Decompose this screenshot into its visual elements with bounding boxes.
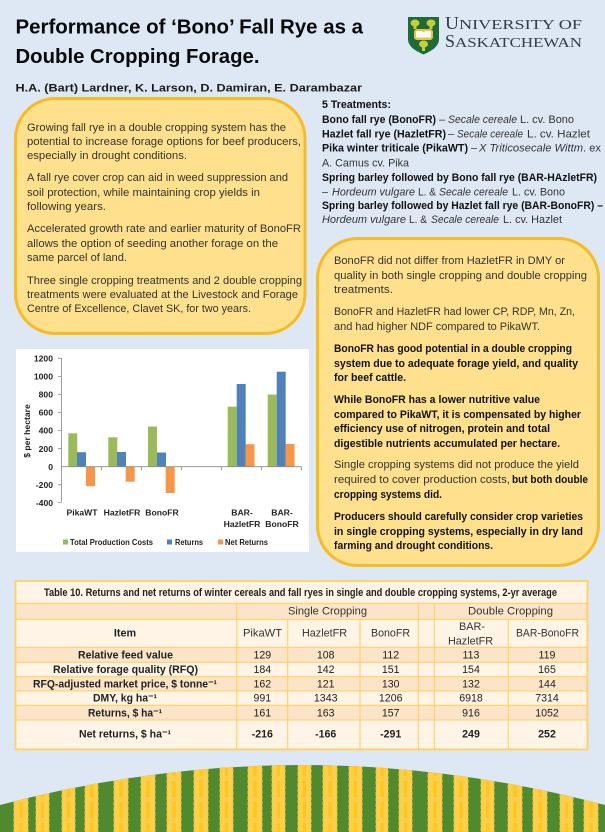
logo wordmark: S	[445, 31, 455, 51]
table values: 165	[538, 664, 556, 676]
table values	[253, 650, 559, 720]
table group headers	[288, 606, 553, 618]
treatment: barley followed by Bono	[322, 172, 597, 198]
bars: total production costs	[68, 394, 277, 467]
table net returns values: -166	[315, 729, 336, 741]
icon: crest shield	[408, 17, 439, 54]
introduction text: Growing fall rye in a double cropping system has the	[27, 122, 286, 134]
table values: 163	[317, 708, 335, 720]
treatment: barley followed by Bono: L. cv. Bono	[512, 186, 565, 198]
chart category labels: BonoFR	[265, 519, 299, 529]
table column headers: BAR-BonoFR	[516, 628, 579, 640]
introduction text: especially in drought conditions.	[27, 150, 187, 162]
logo wordmark: NIVERSITY OF	[459, 17, 583, 32]
title	[16, 16, 364, 68]
treatment: Pika winter triticale	[322, 142, 601, 170]
table column headers: BonoFR	[371, 628, 410, 640]
conclusions: regular text: quality in both single cropping and double cropping	[334, 270, 587, 282]
logo: University of Saskatchewan	[408, 13, 583, 54]
table net returns values: 249	[462, 729, 480, 741]
conclusions: bold text: but both double	[512, 474, 588, 486]
treatment: barley followed by Bono: Spring barley followed by Bono fall rye (BAR-HAzletFR)	[322, 172, 597, 184]
table net returns values	[252, 729, 556, 741]
chart legend	[63, 537, 268, 547]
table values: 119	[539, 650, 556, 662]
introduction text: Centre of Excellence, Clavet SK, for two years.	[27, 303, 251, 315]
conclusions: bold text: digestible nutrients accumulated per hectare.	[334, 438, 560, 450]
chart category labels	[66, 508, 299, 529]
conclusions: regular text: required to cover production costs,	[334, 474, 510, 486]
treatment: barley followed by Hazlet: L. cv. Hazlet	[503, 214, 563, 226]
chart y axis: 0	[48, 462, 53, 472]
logo wordmark: ASKATCHEWAN	[455, 35, 582, 50]
table values: 154	[462, 664, 480, 676]
table values: 162	[253, 679, 271, 691]
conclusions: regular text: treatments.	[334, 284, 393, 296]
chart legend: Returns	[175, 537, 203, 547]
treatment: barley followed by Bono: Secale cereale	[439, 186, 508, 198]
chart category labels: BAR-	[271, 508, 293, 518]
chart y axis	[22, 354, 62, 508]
table values: 121	[317, 679, 335, 691]
table values: 108	[317, 650, 335, 662]
table column headers: Item	[114, 628, 136, 640]
conclusions: bold text: system due to adequate forage yield, and quality	[334, 358, 579, 370]
conclusions: bold text: BonoFR has good potential in a double cropping	[334, 343, 572, 355]
logo wordmark: U	[445, 13, 459, 33]
treatment: barley followed by Hazlet: Secale cereale	[431, 214, 499, 226]
treatment: Pika winter triticale: A. Camus cv. Pika	[322, 158, 410, 170]
table values: 157	[382, 708, 400, 720]
treatment: Hazlet fall rye: Secale cereale	[457, 128, 523, 140]
conclusions: bold text: farming and drought conditions.	[334, 540, 493, 552]
conclusions: regular text: and had higher NDF compared to PikaWT.	[334, 321, 540, 333]
introduction text: same parcel of land.	[27, 252, 127, 264]
chart category labels: HazletFR	[104, 508, 141, 518]
table row labels: Net returns, $ ha⁻¹	[79, 729, 171, 741]
chart y axis: 400	[39, 426, 53, 436]
panel: introduction	[16, 98, 305, 334]
chart y axis: $ per hectare	[22, 404, 32, 458]
introduction text: Accelerated growth rate and earlier maturity of BonoFR	[27, 223, 301, 235]
bars: net returns	[86, 444, 294, 493]
chart legend: Total Production Costs	[70, 537, 153, 547]
conclusions: regular text: BonoFR and HazletFR had lower CP, RDP, Mn, Zn,	[334, 306, 575, 318]
treatment: Hazlet fall rye: L. cv. Hazlet	[527, 128, 591, 140]
table column headers: HazletFR	[448, 636, 493, 648]
treatment: Bono fall rye: –	[439, 114, 446, 126]
conclusions: bold text: compared to PikaWT, it is compensated by higher	[334, 409, 582, 421]
table values: 184	[253, 664, 271, 676]
table values: 1052	[535, 708, 559, 720]
table row labels: DMY, kg ha⁻¹	[93, 693, 157, 705]
conclusions: bold text: While BonoFR has a lower nutritive value	[334, 394, 540, 406]
chart y axis: -400	[36, 498, 53, 508]
table net returns values: 252	[538, 729, 556, 741]
chart y axis: -200	[36, 480, 53, 490]
table group headers: Double Cropping	[468, 606, 553, 618]
table row labels: Relative feed value	[78, 650, 173, 662]
panel: treatments list	[322, 99, 603, 226]
table values: 129	[253, 650, 271, 662]
conclusions: bold text: efficiency use of nitrogen, protein and total	[334, 423, 550, 435]
treatment: barley followed by Hazlet	[322, 200, 603, 226]
table values: 132	[462, 679, 480, 691]
table net returns values: -216	[252, 729, 273, 741]
table row labels	[33, 650, 217, 741]
treatment: Pika winter triticale: Pika winter triticale (PikaWT)	[322, 142, 468, 154]
footer: wheat field banner	[0, 760, 605, 832]
table background rows	[16, 581, 588, 750]
table values: 161	[253, 708, 271, 720]
authors: H.A. (Bart) Lardner, K. Larson, D. Damiran, E. Darambazar	[16, 82, 363, 94]
chart x axis	[62, 467, 302, 470]
conclusions: bold text: for beef cattle.	[334, 372, 406, 384]
bar chart: production costs and returns	[16, 349, 309, 552]
introduction text: Three single cropping treatments and 2 double cropping	[27, 275, 302, 287]
introduction text: soil protection, while maintaining crop yields in	[27, 187, 260, 199]
table values: 151	[382, 664, 400, 676]
treatment: Bono fall rye: Bono fall rye (BonoFR)	[322, 114, 436, 126]
introduction text: treatments were evaluated at the Livestock and Forage	[27, 289, 298, 301]
chart y axis: 600	[39, 408, 53, 418]
treatment: Pika winter triticale: . ex	[583, 142, 601, 154]
treatment: Hazlet fall rye: Hazlet fall rye (HazletFR)	[322, 128, 446, 140]
introduction text: potential to increase forage options for beef producers,	[27, 136, 301, 148]
introduction text	[27, 122, 302, 315]
treatment: Bono fall rye	[322, 114, 574, 126]
chart y axis: 800	[39, 390, 53, 400]
title: Performance of ‘Bono’ Fall Rye as a	[16, 16, 364, 38]
chart category labels: BonoFR	[145, 508, 179, 518]
table values: 991	[253, 693, 271, 705]
treatment: barley followed by Hazlet: L. &	[409, 214, 427, 226]
table: returns and net returns	[16, 581, 588, 750]
conclusions: bold text: in single cropping systems, especially in dry land	[334, 526, 583, 538]
table values: 1206	[379, 693, 403, 705]
table column headers: BAR-	[459, 621, 485, 633]
table values: 130	[382, 679, 400, 691]
panel: conclusions	[318, 238, 598, 566]
introduction text: A fall rye cover crop can aid in weed suppression and	[27, 172, 288, 184]
treatment: Hazlet fall rye: –	[448, 128, 455, 140]
treatment: barley followed by Bono: L. &	[418, 186, 436, 198]
table net returns values: -291	[380, 729, 401, 741]
introduction text: allows the option of seeding another forage on the	[27, 238, 278, 250]
chart y axis: 200	[39, 444, 53, 454]
table values: 916	[462, 708, 480, 720]
treatment: Pika winter triticale: –	[471, 142, 478, 154]
introduction text: following years.	[27, 201, 106, 213]
treatment: Pika winter triticale: X Triticosecale Wittm	[478, 142, 583, 154]
conclusions: regular text	[334, 255, 587, 486]
treatment: Hazlet fall rye	[322, 128, 591, 140]
conclusions: bold text	[334, 343, 588, 552]
chart y axis: 1000	[34, 372, 53, 382]
chart category labels: PikaWT	[66, 508, 98, 518]
conclusions: regular text: BonoFR did not differ from HazletFR in DMY or	[334, 255, 565, 267]
chart category labels: HazletFR	[224, 519, 261, 529]
treatment: barley followed by Bono: –	[322, 186, 329, 198]
table column headers	[114, 621, 579, 648]
table group headers: Single Cropping	[288, 606, 367, 618]
chart legend: Net Returns	[225, 537, 268, 547]
table values: 112	[382, 650, 399, 662]
title: Double Cropping Forage.	[16, 46, 260, 68]
treatment: barley followed by Bono: Hordeum vulgare	[332, 186, 415, 198]
table values: 113	[463, 650, 480, 662]
table values: 144	[538, 679, 556, 691]
table row labels: Returns, $ ha⁻¹	[88, 708, 162, 720]
treatment: Bono fall rye: L. cv. Bono	[520, 114, 574, 126]
table values: 142	[317, 664, 335, 676]
treatments heading: 5 Treatments:	[322, 99, 391, 111]
treatment: barley followed by Hazlet: Hordeum vulgare	[322, 214, 406, 226]
table row labels: Relative forage quality (RFQ)	[53, 664, 198, 676]
table column headers: PikaWT	[243, 628, 282, 640]
chart category labels: BAR-	[231, 508, 253, 518]
table values: 1343	[314, 693, 338, 705]
conclusions: bold text: Producers should carefully consider crop varieties	[334, 511, 583, 523]
table values: 6918	[459, 693, 483, 705]
bars: returns	[77, 372, 286, 467]
treatment: Bono fall rye: Secale cereale	[448, 114, 517, 126]
table column headers: HazletFR	[302, 628, 347, 640]
table row labels: RFQ-adjusted market price, $ tonne⁻¹	[33, 679, 217, 691]
conclusions: regular text: Single cropping systems did not produce the yield	[334, 459, 579, 471]
logo wordmark	[445, 13, 583, 51]
conclusions: bold text: cropping systems did.	[334, 489, 442, 501]
table values: 7314	[535, 693, 559, 705]
chart y axis: 1200	[34, 354, 53, 364]
